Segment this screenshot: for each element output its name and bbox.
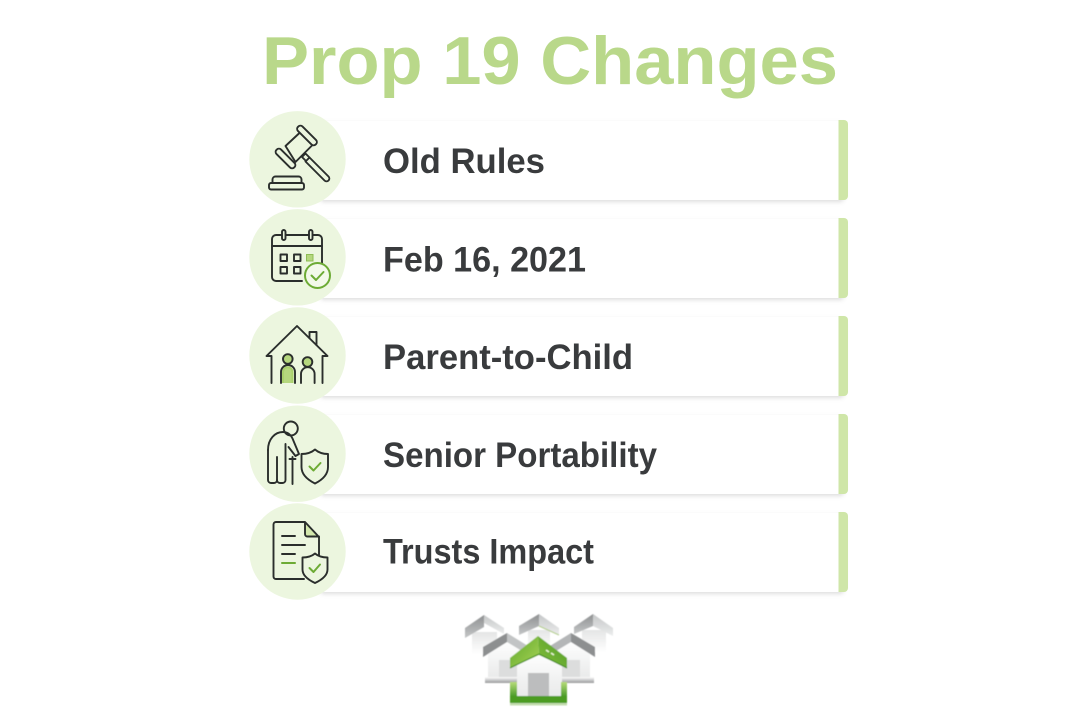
title: Prop 19 Changes bbox=[262, 23, 838, 99]
label: parent-to-child: Parent-to-Child bbox=[383, 338, 633, 377]
icon circle, senior with cane and shield bbox=[249, 406, 346, 502]
front green house bbox=[510, 636, 567, 706]
row 5: trusts impact bbox=[249, 503, 848, 600]
card: trusts impact bbox=[320, 512, 848, 592]
row 4: senior portability bbox=[249, 406, 848, 502]
card: parent-to-child bbox=[320, 316, 848, 396]
icon circle and gavel bbox=[249, 111, 346, 208]
middle-row houses bbox=[483, 633, 595, 683]
card: old rules bbox=[320, 120, 848, 200]
icon circle and house with family bbox=[249, 307, 346, 404]
label: old rules: Old Rules bbox=[383, 142, 545, 181]
row 1: old rules bbox=[249, 111, 848, 208]
icon: neighbourhood of houses bbox=[465, 614, 613, 706]
icon circle, document and shield bbox=[249, 503, 346, 600]
label: senior portability: Senior Portability bbox=[383, 436, 658, 475]
label: trusts impact: Trusts Impact bbox=[383, 532, 594, 572]
back-row houses bbox=[465, 614, 613, 654]
label: date: Feb 16, 2021 bbox=[383, 240, 586, 280]
card: date bbox=[320, 218, 848, 298]
card: senior portability bbox=[320, 414, 848, 494]
row 3: parent-to-child bbox=[249, 307, 848, 404]
row 2: date bbox=[249, 209, 848, 306]
icon circle and calendar bbox=[249, 209, 346, 306]
